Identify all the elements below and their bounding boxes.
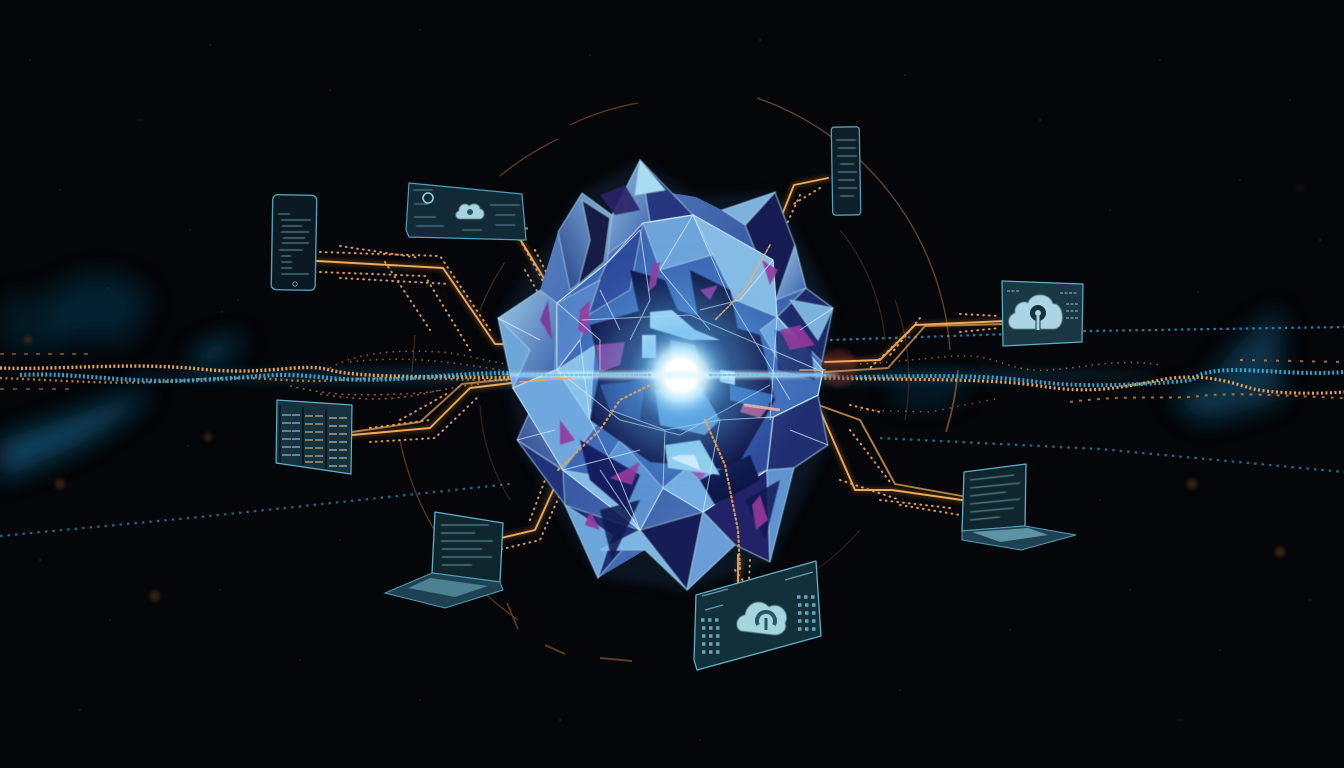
bright inner panes [600,310,775,475]
core horizontal flare [500,372,840,378]
connector core lines [317,178,1006,610]
connector halos [317,178,1006,610]
front shell [513,215,823,530]
device: table panel left [276,400,352,474]
device: phone upper right [831,127,861,215]
phone left screen lines [278,214,311,274]
device: cloud panel bottom [694,561,821,670]
lens flare right of crystal [819,349,857,387]
key grids [701,620,722,652]
crystal silhouette [498,160,833,590]
dark interior facets [580,270,815,560]
laptop right keyboard [972,528,1048,542]
laptop left keyboard [408,578,488,597]
magenta facets [540,185,815,530]
table rows [280,405,326,469]
phone left home button [293,282,297,286]
device: phone left [271,195,317,290]
bokeh spots [24,184,1304,601]
light band: blue and orange data streams [0,327,1344,536]
connector sparks [320,188,1000,620]
device: laptop right [962,464,1076,550]
pale shell facets [513,215,823,530]
device: panel upper left [406,183,526,240]
cloud icon bottom [737,602,787,635]
core glow [600,295,760,455]
panel cloud icon [456,204,484,219]
outer facets [498,160,833,590]
circuit connectors [317,178,1006,620]
device: laptop left [385,512,503,608]
cloud icon right [1009,295,1062,329]
streams over crystal [520,245,825,570]
nebula clouds [0,274,1280,480]
orbital rings [400,98,958,661]
device: cloud panel right [1002,281,1083,346]
crystal outer glow [498,160,833,590]
crystal [498,160,840,590]
facet edge lines [498,215,833,530]
